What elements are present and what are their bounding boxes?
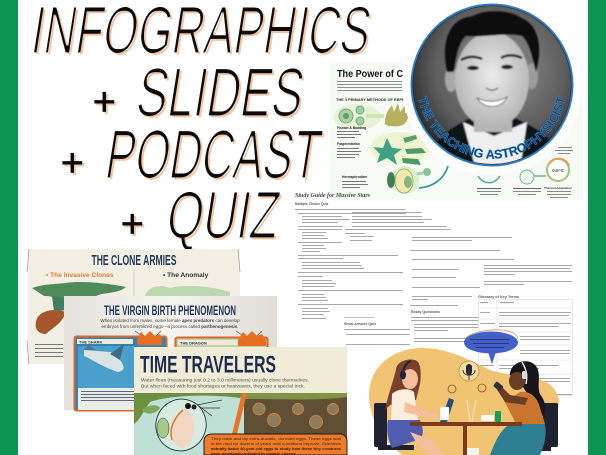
anomaly illustration [145,286,230,297]
illustration: water with daphnia [134,392,244,455]
callout: dormant eggs text: actually hatch 40-year-old eggs to study how these tiny creatures [211,446,342,451]
curved name text: THE TEACHING ASTROPHYSICIST [418,96,566,159]
panel: the virgin birth phenomenon [64,296,277,410]
card: the shark: THE SHARK [79,340,102,344]
intro text: But when faced with food shortages or heatwaves, they use a special trick. [141,384,305,390]
hermaphrodism caption: Hermaphrodism [342,175,367,179]
left green border [0,0,18,455]
phone [494,382,504,391]
icon: chat bubble right [478,384,486,392]
illustration: budding [333,103,411,130]
intro text: Water fleas (measuring just 0.2 to 3.0 millimeters) usually clone themselves. [141,378,309,384]
heading: TIME TRAVELERS [140,352,276,378]
budding caption: Fission & Budding [337,126,366,130]
methods subheading: THE 3 PRIMARY METHODS OF REPR [336,97,405,102]
speech bubble text lines [470,339,510,348]
hermaphrodism caption [342,175,368,188]
body text [35,344,63,357]
illustration: podcast conversation [369,348,559,455]
icon: chat bubble left [448,385,456,393]
glossary heading: Glossary of Key Terms [478,295,519,299]
orange divider [231,393,247,438]
illustration: aphid bud [387,166,448,194]
illustration: starfish fragments [370,132,430,165]
heading: + QUIZ: + [120,200,145,247]
portrait [410,4,574,170]
heading: + QUIZ [120,178,285,253]
document heading: Study Guide for Massive Stars [295,193,371,199]
bottom right indicators: Thermal Adaptation [544,186,572,190]
burst icon [137,331,162,345]
fragmentation caption: Fragmentation [337,142,360,146]
left subheading: • The Invasive Clones [46,272,114,279]
heading: + SLIDES [92,53,310,131]
callout: dormant eggs text [204,434,347,455]
card: the shark [74,331,166,410]
intro text: When isolated from males, some female apex predators can develop [100,318,240,323]
document subheading: Multiple Choice Quiz [295,202,329,206]
quiz text lines left column [295,209,406,319]
illustration: soil with dormant eggs [244,393,347,455]
card: the dragon [176,331,268,378]
right subheading: • The Anomaly [163,272,209,279]
speech bubble [464,330,518,364]
bottom right indicators [477,147,573,198]
panel: the power of cloning infographic [330,63,583,200]
budding caption [337,126,366,138]
woman left [385,359,445,455]
intro text [100,318,240,329]
intro text lines [337,81,403,91]
panel title: The Power of C [337,69,403,80]
headphones [522,362,527,384]
icon: microphone [459,361,479,381]
headphones [402,360,412,371]
table with items [410,398,522,455]
glossary table [478,300,572,396]
essay lines [411,265,572,342]
panel: time travelers [134,347,347,455]
heading: + PODCAST [60,115,327,193]
temperature gauge: 0.5°C [552,168,564,173]
world map with crayfish [32,282,126,334]
heading: + QUIZ: QUIZ [162,178,285,253]
heading: + SLIDES: SLIDES [132,53,310,131]
callout: dormant eggs text: in the mud for dozens of years until conditions improve. Scientists [211,441,341,446]
heading: + SLIDES: + [92,78,117,125]
short-answer heading: Short Answer Quiz [344,322,376,326]
photo badge: the teaching astrophysicist [402,4,582,175]
right green border [588,0,606,455]
heading: THE CLONE ARMIES [92,253,177,269]
heading: THE VIRGIN BIRTH PHENOMENON [104,302,236,318]
panel: study guide document [295,193,572,396]
panel: the clone armies [27,249,240,364]
title: infographics slides podcast quiz [27,0,376,253]
heading: + PODCAST: PODCAST [101,115,327,193]
intro text [141,378,309,390]
intro text: embryos from unfertilized eggs—a process called parthenogenesis. [101,324,239,329]
callout: dormant eggs text: They mate and lay extra-durable, dormant eggs. These eggs wait [211,436,342,441]
woman right [490,361,546,455]
background blob [369,348,559,455]
heading: + PODCAST: + [60,139,85,186]
chairs [374,403,558,451]
card: the dragon: THE DRAGON [180,340,207,346]
quiz text lines centre column [345,212,514,306]
short-answer lines [344,317,410,345]
essay heading: Essay Questions [411,310,440,314]
fragmentation caption [337,142,361,158]
